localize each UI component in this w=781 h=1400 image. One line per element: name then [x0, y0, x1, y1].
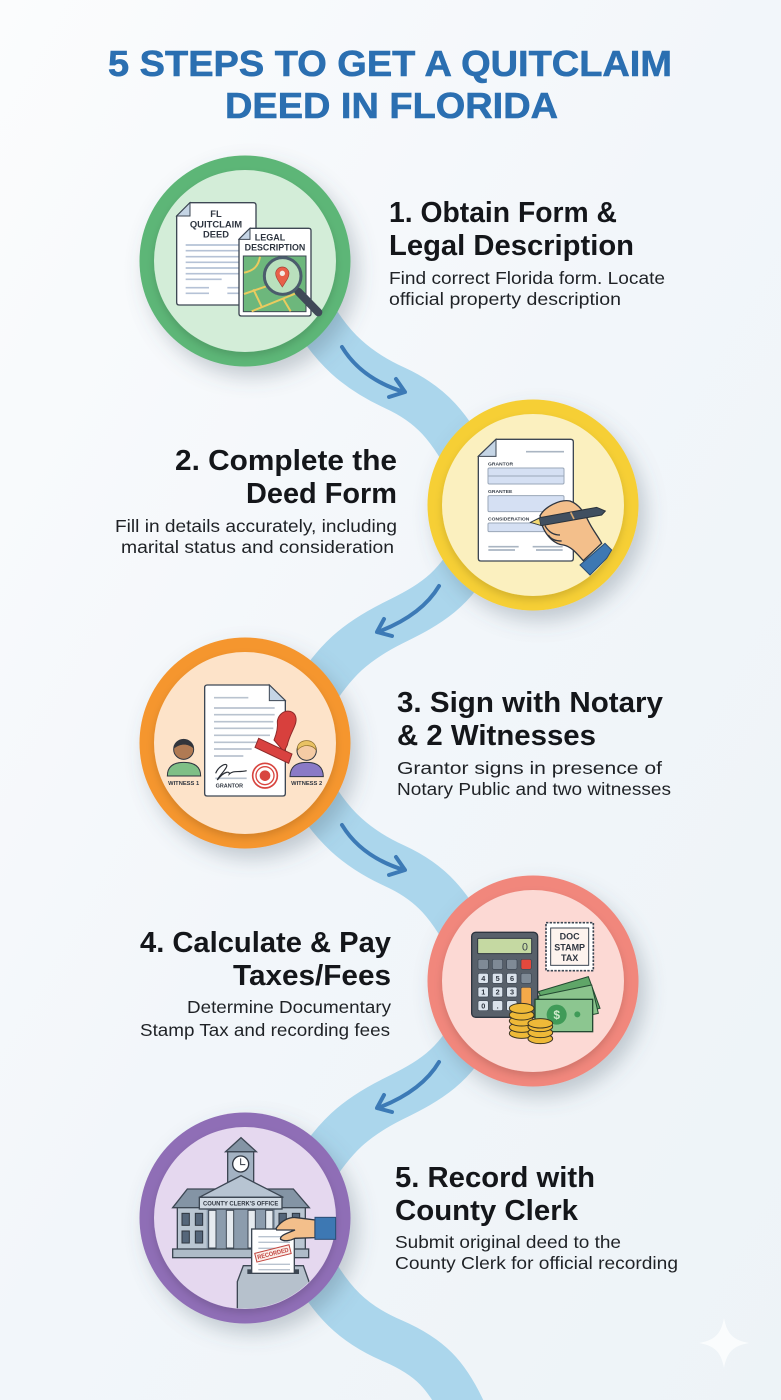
icon: calculator, tax stamp, cash and coins: TAX — [561, 953, 578, 963]
icon: deed and map documents: FL — [210, 209, 222, 219]
arrow: step 1 to 2 — [342, 347, 405, 397]
step 3 text: & 2 Witnesses — [397, 720, 596, 752]
icon: calculator, tax stamp, cash and coins: 6 — [510, 974, 514, 983]
icon: signed document, stamp and witnesses: WITNESS 1 — [168, 781, 199, 787]
arrow: step 3 to 4 — [342, 825, 405, 875]
step 2 text: Fill in details accurately, including — [115, 516, 397, 536]
title — [108, 43, 672, 126]
step 5 text: County Clerk for official recording — [395, 1253, 678, 1273]
step 5 text: Submit original deed to the — [395, 1232, 621, 1252]
step 1 text: official property description — [389, 289, 621, 309]
icon: deed and map documents: QUITCLAIM — [190, 219, 242, 229]
icon: calculator, tax stamp, cash and coins: 5 — [496, 974, 500, 983]
step 2 text — [115, 445, 397, 557]
step 3 text: Notary Public and two witnesses — [397, 779, 671, 799]
step 2 badge — [428, 400, 638, 610]
icon: calculator, tax stamp, cash and coins: 2 — [496, 988, 500, 997]
icon: deed and map documents — [177, 203, 318, 316]
step 1 text — [389, 197, 665, 309]
step 3 text — [397, 687, 671, 799]
icon: hand completing deed form: GRANTEE — [488, 489, 513, 495]
icon: calculator, tax stamp, cash and coins: 0 — [481, 1001, 485, 1010]
arrow: step 4 to 5 — [377, 1062, 439, 1112]
icon: calculator, tax stamp, cash and coins: 4 — [481, 974, 486, 983]
icon: signed document, stamp and witnesses: GRANTOR — [216, 783, 243, 789]
step 3 text: Grantor signs in presence of — [397, 758, 662, 778]
step 4 text: Determine Documentary — [187, 997, 391, 1017]
icon: deed and map documents: DESCRIPTION — [245, 243, 305, 253]
icon: calculator, tax stamp, cash and coins: DOC — [560, 932, 580, 942]
icon: deed and map documents: DEED — [203, 230, 229, 240]
step 3 badge — [140, 638, 350, 848]
icon: calculator, tax stamp, cash and coins: 0 — [522, 942, 528, 954]
step 1 text: 1. Obtain Form & — [389, 197, 617, 229]
step 2 text: 2. Complete the — [175, 445, 397, 477]
winding path connecting the steps — [305, 300, 475, 1400]
icon: hand completing deed form — [478, 439, 612, 575]
icon: calculator, tax stamp, cash and coins: . — [497, 1001, 499, 1010]
title: 5 STEPS TO GET A QUITCLAIM — [108, 43, 672, 84]
step 1 text: Find correct Florida form. Locate — [389, 268, 665, 288]
icon: county clerk building and recording drop box: COUNTY CLERK'S OFFICE — [203, 1201, 279, 1208]
icon: county clerk building and recording drop box: RECORDED — [257, 1247, 290, 1261]
icon: deed and map documents: LEGAL — [255, 233, 286, 243]
title: DEED IN FLORIDA — [225, 85, 558, 126]
step 4 text: Stamp Tax and recording fees — [140, 1020, 390, 1040]
step 2 text: Deed Form — [246, 478, 397, 510]
icon: calculator, tax stamp, cash and coins: $ — [553, 1008, 560, 1022]
icon: hand completing deed form: CONSIDERATION — [488, 516, 530, 522]
step 5 text — [395, 1162, 678, 1273]
step 4 text — [140, 927, 391, 1040]
icon: signed document, stamp and witnesses: WITNESS 2 — [291, 781, 322, 787]
step 5 text: County Clerk — [395, 1195, 579, 1227]
icon: calculator, tax stamp, cash and coins — [472, 923, 600, 1044]
icon: signed document, stamp and witnesses — [167, 685, 323, 796]
step 1 badge — [140, 156, 350, 366]
icon: county clerk building and recording drop box — [173, 1138, 336, 1312]
step 2 text: marital status and consideration — [121, 537, 394, 557]
step 3 text: 3. Sign with Notary — [397, 687, 663, 719]
icon: calculator, tax stamp, cash and coins: STAMP — [554, 942, 585, 952]
step 4 text: Taxes/Fees — [233, 960, 391, 992]
icon: hand completing deed form: GRANTOR — [488, 461, 514, 467]
arrow: step 2 to 3 — [377, 586, 439, 636]
step 1 text: Legal Description — [389, 230, 634, 262]
step 4 text: 4. Calculate & Pay — [140, 927, 391, 959]
icon: sparkle watermark — [699, 1318, 749, 1368]
step 4 badge — [428, 876, 638, 1086]
icon: calculator, tax stamp, cash and coins: 3 — [510, 988, 514, 997]
icon: calculator, tax stamp, cash and coins: 1 — [481, 988, 485, 997]
step 5 text: 5. Record with — [395, 1162, 595, 1194]
step 5 badge — [140, 1112, 350, 1324]
